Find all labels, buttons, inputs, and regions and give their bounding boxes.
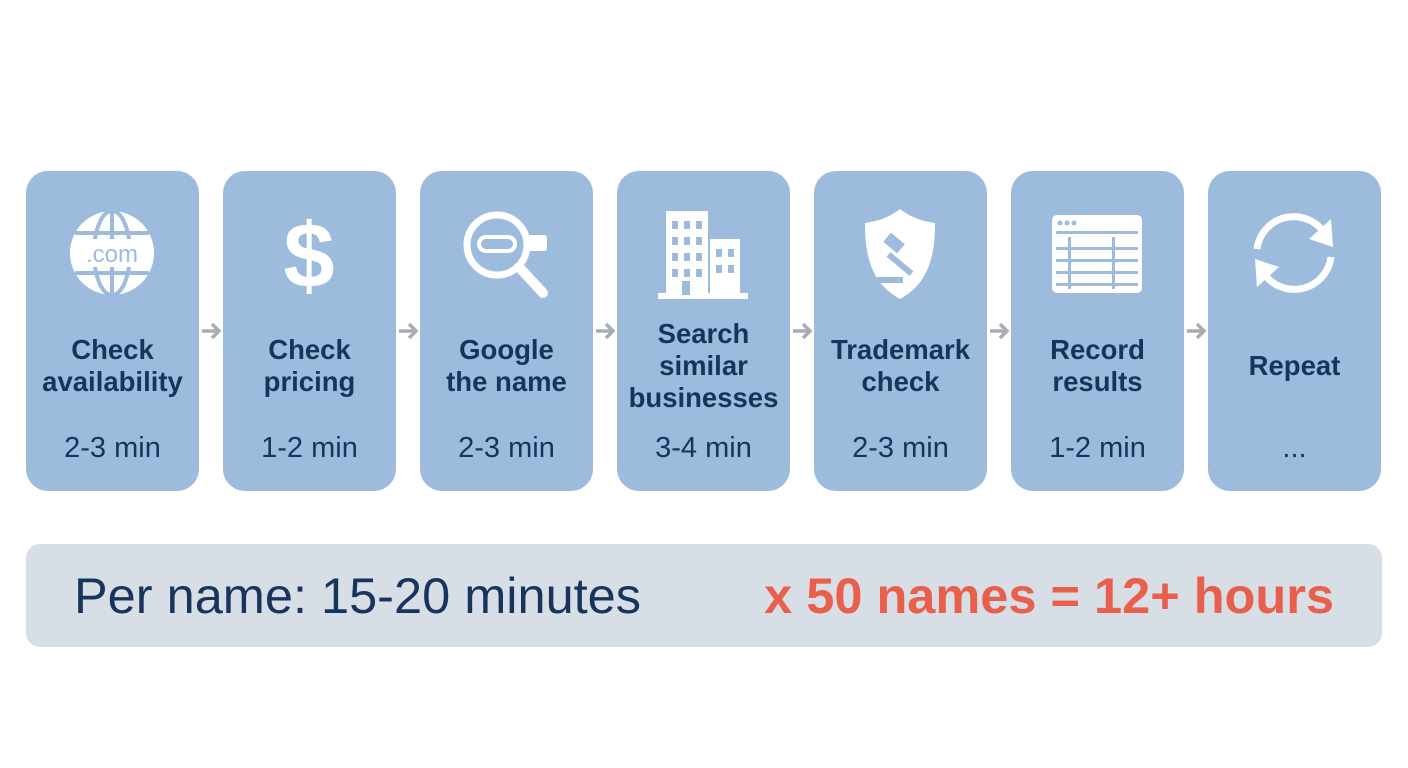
card: trademark check: [814, 171, 987, 491]
summary bar: [26, 544, 1382, 647]
title: Search: [658, 318, 749, 349]
card: check availability: [26, 171, 199, 491]
title: Repeat: [1249, 350, 1340, 381]
title: Check: [268, 334, 351, 365]
icon: refresh: [1254, 213, 1334, 293]
arrow: [596, 322, 616, 340]
icon: globe .com: [70, 212, 154, 294]
card: repeat: [1208, 171, 1381, 491]
title: [1050, 334, 1145, 397]
arrow: [990, 322, 1010, 340]
time: 2-3 min: [458, 432, 555, 464]
time: 2-3 min: [64, 432, 161, 464]
arrow: [793, 322, 812, 340]
title: similar: [659, 350, 748, 381]
title: the name: [446, 366, 567, 397]
icon: spreadsheet: [1052, 215, 1142, 293]
title: [42, 334, 183, 397]
title: Record: [1050, 334, 1145, 365]
title: availability: [42, 366, 183, 397]
title: pricing: [264, 366, 355, 397]
title: [629, 318, 778, 413]
per name text: Per name: 15-20 minutes: [74, 567, 641, 624]
icon: buildings: [658, 211, 748, 299]
icon: globe .com: .com: [86, 241, 138, 268]
arrow: [202, 322, 222, 340]
time: 2-3 min: [852, 432, 949, 464]
time: 1-2 min: [1049, 432, 1146, 464]
title: Check: [71, 334, 154, 365]
title: [831, 334, 970, 397]
arrow: [399, 322, 418, 340]
title: Google: [459, 334, 554, 365]
time: ...: [1282, 432, 1307, 464]
title: [264, 334, 355, 397]
icon: shield gavel: [865, 209, 935, 299]
title: results: [1052, 366, 1143, 397]
time: 1-2 min: [261, 432, 358, 464]
title: Trademark: [831, 334, 970, 365]
total text: x 50 names = 12+ hours: [764, 567, 1334, 624]
title: businesses: [629, 382, 778, 413]
time: 3-4 min: [655, 432, 752, 464]
card: record results: [1011, 171, 1184, 491]
card: search similar businesses: [617, 171, 790, 491]
title: check: [862, 366, 939, 397]
icon: magnifier: [464, 212, 548, 298]
title: [446, 334, 567, 397]
arrow: [1187, 322, 1206, 340]
card: google the name: [420, 171, 593, 491]
card: check pricing: [223, 171, 396, 491]
